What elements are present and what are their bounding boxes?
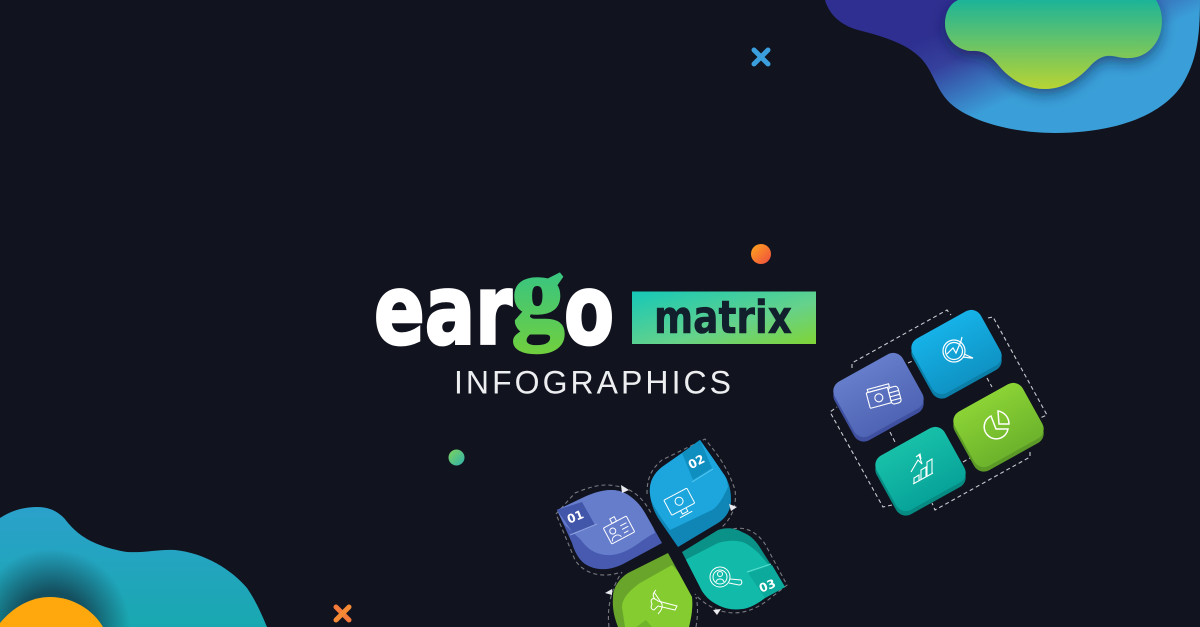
icon: magnifier with trend: [943, 337, 973, 362]
card: money: [829, 349, 928, 446]
icon: orange dot: [751, 244, 771, 264]
blob: top right inner: [945, 0, 1162, 89]
blob: top right: [825, 0, 1200, 133]
petal 03: [682, 528, 785, 610]
icon: banknotes and coins: [865, 382, 902, 410]
markers: white triangles: [605, 485, 737, 615]
icon: pie chart: [984, 411, 1009, 439]
badge: matrix: matrix: [654, 291, 792, 344]
petal 02: [650, 440, 731, 547]
subtitle: infographics: INFOGRAPHICS: [454, 364, 731, 400]
logo: eargo: o: [564, 254, 614, 366]
blob: bottom left: [0, 507, 267, 627]
logo: eargo: [374, 235, 614, 366]
icon: orange cross: [336, 607, 349, 620]
matrix diagram: four cards: [829, 306, 1048, 520]
dashed connectors: [830, 310, 1047, 510]
dashed outlines: [556, 439, 787, 627]
process diagram: four petals: [550, 439, 790, 627]
petal 04: [613, 553, 695, 627]
icon: blue cross: [754, 50, 768, 64]
icon: wrench and hammer: [651, 590, 677, 614]
icon: magnifier with person: [710, 567, 742, 587]
card: magnifier: [907, 306, 1006, 403]
icon: green dot: [448, 450, 464, 466]
icon: growth chart: [911, 454, 933, 484]
card: growth chart: [871, 423, 970, 520]
card: pie chart: [949, 379, 1048, 476]
petal 01: [557, 490, 662, 570]
tag number 03: 03: [757, 576, 778, 596]
icon: monitor: [664, 488, 698, 521]
blob: orange core: [0, 597, 103, 627]
icon: id badge: [601, 512, 635, 544]
logo: eargo: g: [512, 235, 564, 352]
tag number 01: 01: [565, 507, 586, 527]
logo: eargo: ear: [374, 254, 513, 366]
tag number 02: 02: [686, 452, 707, 472]
